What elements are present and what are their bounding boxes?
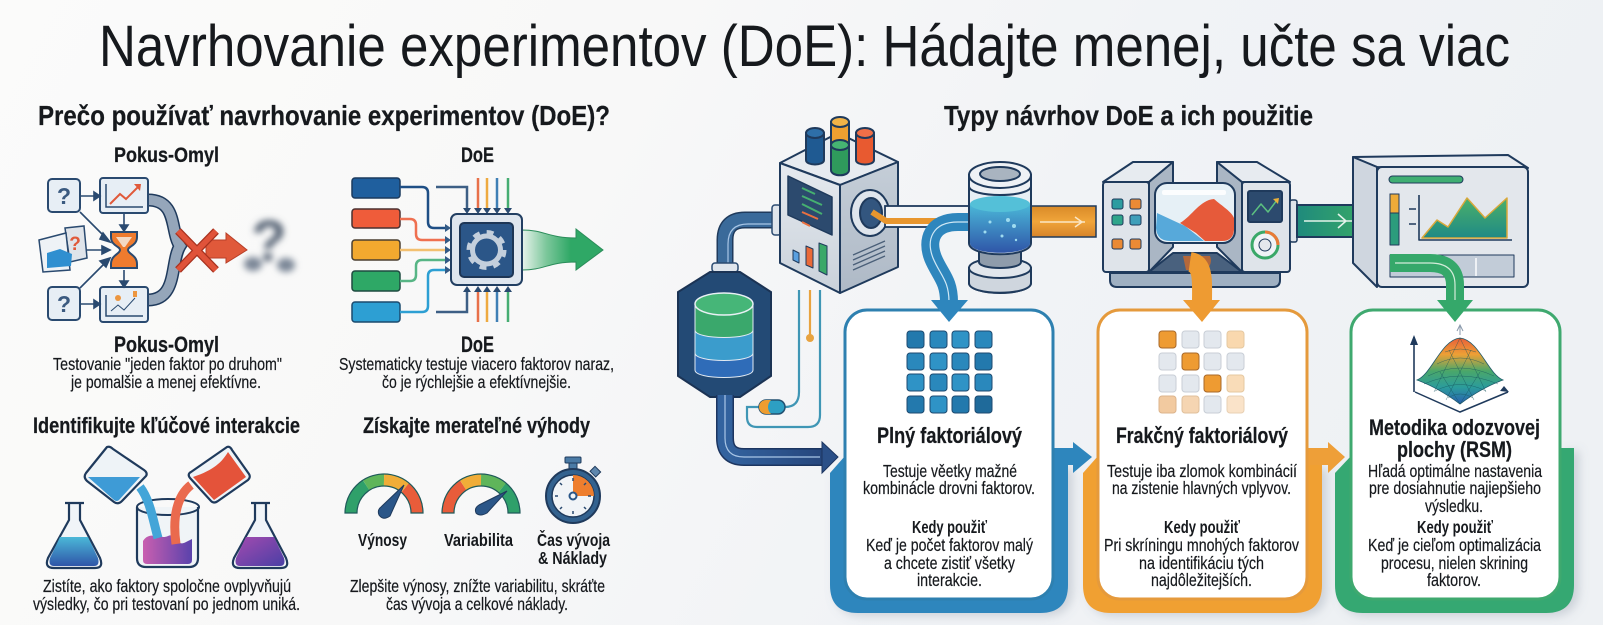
icon: blurred question mark [244, 209, 295, 274]
icon: DoE inputs and processor [352, 178, 603, 322]
labels: benefits: & Náklady [538, 548, 607, 568]
icon: yield gauge [345, 474, 423, 518]
icon: trial and error flow: ? [57, 183, 71, 209]
label: DoE top: DoE [461, 144, 494, 167]
card title [1369, 415, 1540, 462]
text: trial and error: Testovanie "jeden faktor po druhom" [53, 354, 282, 374]
card body: Hľadá optimálne nastavenia [1368, 461, 1542, 481]
text: DoE: Systematicky testuje viacero faktorov naraz, [339, 354, 614, 374]
text: interactions [33, 576, 300, 614]
text: benefits: Zlepšite výnosy, znížte variabilitu, skráťte [350, 576, 605, 596]
thin connector lines [747, 290, 820, 427]
icon: blurred question mark: ? [251, 209, 287, 274]
orange pipe [1030, 206, 1096, 237]
label: Pokus-Omyl top: Pokus-Omyl [114, 144, 219, 167]
heading: why use DoE: Prečo používať navrhovanie experimentov (DoE)? [38, 100, 610, 131]
card body: Kedy použiť [1164, 517, 1240, 537]
text: benefits: čas vývoja a celkové náklady. [386, 594, 568, 614]
icon: variability gauge [442, 474, 520, 515]
card body: kombinácle drovni faktorov. [863, 478, 1035, 498]
input cylinders [806, 117, 874, 175]
icon: trial and error flow [39, 178, 247, 322]
pipe from bottle to cube [712, 205, 781, 272]
labels: benefits [358, 529, 610, 568]
card: full factorial [830, 310, 1092, 613]
card body: procesu, nielen skrining [1381, 553, 1528, 573]
text: trial and error: Pokus-Omyl [114, 332, 219, 357]
arrow: orange to fractional factorial [1183, 256, 1220, 322]
card: response surface methodology [1335, 310, 1574, 613]
card body: interakcie. [917, 570, 982, 590]
card body: faktorov. [1427, 570, 1481, 590]
heading: DoE design types: Typy návrhov DoE a ich použitie [944, 100, 1313, 131]
card body: výsledku. [1425, 496, 1483, 516]
icon: response surface [1410, 325, 1509, 412]
card body: na zistenie hlavných vplyvov. [1112, 478, 1291, 498]
card body: Pri skríningu mnohých faktorov [1104, 535, 1299, 555]
panel: why use DoE [33, 100, 614, 614]
text: interactions: výsledky, čo pri testovaní po jednom uniká. [33, 594, 300, 614]
machine: mixing cube [780, 117, 898, 293]
arrow: blue to full factorial [930, 222, 968, 322]
machine: analysis monitor [1353, 155, 1528, 287]
heading: measurable benefits: Získajte merateľné výhody [363, 413, 591, 438]
card: fractional factorial [1083, 310, 1345, 613]
card body: najdôležitejších. [1151, 570, 1252, 590]
card body: na identifikáciu tých [1139, 553, 1264, 573]
card title: Metodika odozvovej [1369, 415, 1540, 440]
card title: plochy (RSM) [1397, 437, 1512, 462]
icon: trial and error flow: ? [69, 234, 81, 255]
text: benefits [350, 576, 605, 614]
bottle: database [678, 272, 771, 397]
card body: pre dosiahnutie najiepšieho [1369, 478, 1541, 498]
icon: trial and error flow: ? [57, 291, 71, 317]
labels: benefits: Čas vývoja [537, 529, 610, 550]
labels: benefits: Výnosy [358, 530, 407, 550]
card body: Kedy použiť [912, 517, 987, 537]
text: interactions: Zistíte, ako faktory spoločne ovplyvňujú [43, 576, 291, 596]
card title: Plný faktoriálový [877, 423, 1023, 448]
card body: Keď je cieľom optimalizácia [1368, 535, 1541, 555]
machine: fractional unit [1103, 162, 1297, 287]
heading: key interactions: Identifikujte kľúčové interakcie [33, 413, 300, 438]
text: trial and error: je pomalšie a menej efektívne. [70, 372, 261, 392]
card title: Frakčný faktoriálový [1116, 423, 1289, 448]
card body: Testuje věetky mažné [883, 461, 1017, 481]
card body [1368, 461, 1542, 590]
text: trial and error [53, 332, 282, 392]
arrow: navy to full factorial [725, 395, 838, 473]
capsule connector [759, 334, 814, 414]
arrow: green to RSM [1390, 263, 1473, 322]
icon: full grid [907, 331, 992, 413]
card body: Keď je počet faktorov malý [866, 535, 1033, 555]
icon: flasks and beaker [47, 447, 287, 568]
card body [863, 461, 1035, 590]
card body: a chcete zistiť všetky [884, 553, 1015, 573]
card body: Kedy použiť [1417, 517, 1493, 537]
machine: reactor cylinder [969, 162, 1031, 293]
icon: stopwatch [546, 457, 601, 523]
card body: Testuje iba zlomok kombinácií [1107, 461, 1297, 481]
text: DoE: čo je rýchlejšie a efektívnejšie. [382, 372, 571, 392]
icon: fractional grid [1159, 331, 1244, 413]
text: DoE [339, 332, 614, 392]
white pipe and orange tube [872, 206, 970, 227]
card body [1104, 461, 1299, 590]
labels: benefits: Variabilita [444, 530, 513, 550]
green pipe [1297, 201, 1372, 241]
diagram: process pipeline [678, 117, 1528, 427]
text: DoE: DoE [461, 332, 494, 357]
